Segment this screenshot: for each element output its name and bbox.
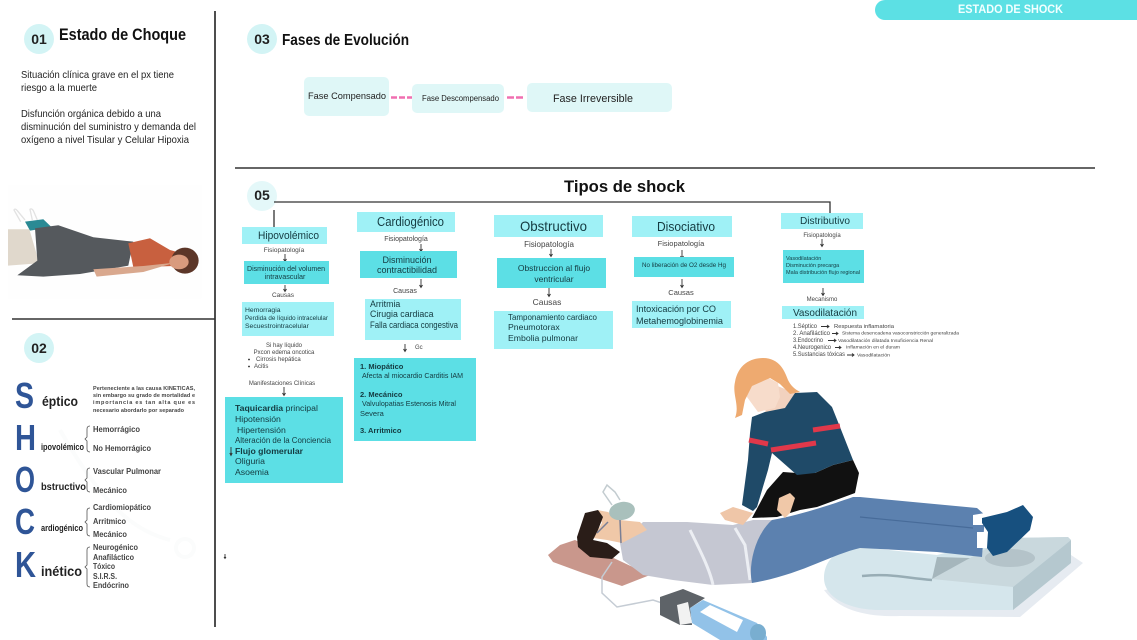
clinical manifestations box [225,397,343,483]
badge 02 [24,333,54,363]
pathophysiology box [497,258,606,288]
mechanism list: 4.Neurogenico [793,345,832,351]
septic description: Perteneciente a las causa KINETICAS, [93,386,195,392]
mechanism list: Sistema desencadena vasoconstricción generalizada [842,330,960,336]
acronym words: éptico [42,393,78,409]
column: Obstructivo: Causas [533,297,561,307]
acronym letters [15,375,36,585]
mechanism list: Respuesta inflamatoria [834,324,895,330]
phase: compensado [304,77,389,116]
column: Obstructivo: Fisiopatología [524,240,574,249]
subtype lists: Tóxico [93,562,115,571]
causes box [242,302,334,336]
title: Cardiogénico [377,214,444,229]
subtype lists: Mecánico [93,530,127,539]
definition text: Disfunción orgánica debido a una [21,108,161,120]
title [242,227,327,244]
mechanism list: 1.Séptico [793,324,818,330]
acronym letters: C [15,501,35,542]
column: Disociativo: Fisiopatología [658,239,705,248]
clinical manifestations box: Flujo glomerular [235,446,304,456]
phase: descompensado: Fase Descompensado [422,94,500,103]
subtypes box [354,358,476,441]
causes box: Arritmia [370,299,400,309]
title [357,212,455,232]
septic description: sin embargo su grado de mortalidad e [93,393,195,399]
fluid notes: Acitis [254,364,268,370]
mechanism list: 5.Sustancias tóxicas [793,352,845,358]
badge 03: 03 [254,31,270,47]
column: Cardiogénico [354,212,476,441]
mechanism list: Vasodilatación dilatada Insuficiencia Renal [838,338,933,343]
acronym words: ipovolémico [41,442,84,452]
clinical manifestations box: Hipotensión [235,414,281,424]
connector [507,96,524,99]
phase: compensado: Fase Compensado [308,91,386,102]
subtype braces [85,426,90,587]
column: Distributivo: Mecanismo [807,297,838,303]
subtype lists: No Hemorrágico [93,444,151,453]
subtype lists: Endócrino [93,581,129,590]
clinical manifestations box: Asoemia [235,467,269,477]
causes box: Falla cardiaca congestiva [370,320,458,330]
connector tree [274,202,830,227]
pathophysiology box: Disminución del volumen [247,264,325,273]
heading: Fases de Evolución: Fases de Evolución [282,32,409,49]
subtype lists: Cardiomiopático [93,503,151,512]
causes box: Hemorragia [245,307,281,314]
causes box: Cirugia cardiaca [370,309,434,319]
pathophysiology box: Disminución [382,255,432,265]
heading: Tipos de shock: Tipos de shock [564,177,686,196]
causes box: Tamponamiento cardiaco [508,312,597,322]
heading: Estado de Choque: Estado de Choque [59,25,186,44]
subtype lists: Hemorrágico [93,425,140,434]
acronym words [41,393,86,579]
pathophysiology box: Mala distribución flujo regional [786,270,860,276]
column: Distributivo [781,213,960,358]
acronym letters: O [15,459,35,500]
fluid notes: Si hay líquido [266,343,303,349]
header pill: Estado de Shock: ESTADO DE SHOCK [958,4,1064,16]
column: Cardiogénico: Gc [415,345,423,351]
pathophysiology box: ventricular [534,274,574,284]
title: Hipovolémico [258,230,319,242]
acronym words: bstructivo [41,482,86,493]
column: Cardiogénico: Causas [393,288,417,295]
mechanism list [793,324,960,358]
subtype lists: Vascular Pulmonar [93,467,161,476]
subtypes box: 2. Mecánico [360,390,403,399]
badge 05 [247,181,277,211]
badge 02: 02 [31,340,47,356]
illustration: rescuer assisting patient with oxygen mask and raised legs [548,358,1083,640]
panel 02: SHOCK acronym [15,333,195,590]
clinical manifestations box: Oliguria [235,456,265,466]
causes box: Intoxicación por CO [636,304,716,315]
acronym letters: H [15,417,36,458]
column: Hipovolémico: Fisiopatología [264,247,305,254]
fluid notes: Pxcon edema oncotica [254,350,315,356]
phase: descompensado [412,84,504,113]
causes box: Embolia pulmonar [508,333,578,343]
causes box: Metahemoglobinemia [636,316,724,327]
title [781,213,863,229]
patient [548,485,1033,586]
mat [824,537,1083,617]
column: Hipovolémico [225,227,343,483]
badge 01: 01 [31,31,47,47]
pathophysiology box: No liberación de O2 desde Hg [642,262,726,269]
watermark: stethoscope [60,430,194,557]
badge 01 [24,24,54,54]
subtypes box: Valvulopatias Estenosis Mitral [362,399,456,408]
title: Disociativo [657,220,715,234]
panel 01: Estado de Choque [8,24,201,298]
definition text: riesgo a la muerte [21,82,97,94]
column: Disociativo: Causas [668,288,694,297]
mechanism list: 2. Anafiláctico [793,331,831,337]
fluid notes: Manifestaciones Clínicas [249,381,315,387]
illustration: patient lying with legs raised [8,185,201,298]
acronym words: inético [41,563,82,579]
rescuer [720,358,859,525]
acronym words: ardiogénico [41,523,83,533]
connector [391,96,414,99]
clinical manifestations box: Hipertensión [237,425,286,435]
acronym letters: S [15,375,34,416]
pathophysiology box: Obstruccion al flujo [518,263,590,273]
column: Obstructivo [494,215,613,349]
mechanism list: Inflamación en el duram [846,344,900,350]
causes box [632,301,731,328]
subtypes box: 1. Miopático [360,362,404,371]
fluid notes: Cirrosis hepática [256,357,301,363]
column: Disociativo [632,216,734,328]
definition text: Situación clínica grave en el px tiene [21,69,174,81]
header pill: Estado de Shock [875,0,1137,20]
definition text [21,69,196,146]
subtypes box: Severa [360,409,385,418]
acronym letters: K [15,544,36,585]
subtype lists: S.I.R.S. [93,572,117,581]
subtypes box: Afecta al miocardio Carditis IAM [362,371,463,380]
clinical manifestations box: Taquicardia principal [235,403,318,413]
septic description: necesario abordarlo por separado [93,408,185,414]
clinical manifestations box: Alteración de la Conciencia [235,435,331,445]
subtype lists [93,425,161,590]
badge 03 [247,24,277,54]
causes box [494,311,613,349]
subtype lists: Arritmico [93,517,126,526]
subtype lists: Anafiláctico [93,553,134,562]
causes box: Secuestrointracelular [245,323,310,330]
septic description [93,386,195,414]
phase: irreversible [527,83,672,112]
causes box [365,299,461,340]
causes box: Perdida de líquido intracelular [245,315,329,322]
small arrow [224,554,226,558]
pathophysiology box: contractibilidad [377,265,437,275]
title: Obstructivo [520,218,587,234]
pathophysiology box: Disminución precarga [786,263,840,269]
fluid notes [248,343,315,387]
pathophysiology box [783,250,864,283]
subtype lists: Mecánico [93,486,127,495]
pathophysiology box [244,261,329,284]
phase: irreversible: Fase Irreversible [553,93,633,105]
mechanism list: Vasodilatación [857,352,891,358]
column: Hipovolémico: Causas [272,292,295,299]
mechanism list: 3.Endocrino [793,338,824,344]
septic description: importancia es tan alta que es [93,400,195,406]
definition text: oxígeno a nivel Tisular y Celular Hipoxia [21,134,189,146]
oxygen cylinder [602,562,767,640]
badge 05: 05 [254,187,270,203]
subtypes box: 3. Arritmico [360,426,402,435]
column: Cardiogénico: Fisiopatología [384,236,428,243]
column: Distributivo: Fisiopatología [803,233,841,239]
mechanism box: Vasodilatación [793,307,857,319]
causes box: Pneumotorax [508,322,560,332]
subtype lists: Neurogénico [93,543,138,552]
pathophysiology box: intravascular [265,272,306,281]
pathophysiology box: Vasodilatación [786,256,821,262]
pathophysiology box [360,251,457,278]
title: Distributivo [800,216,850,227]
definition text: disminución del suministro y demanda del [21,121,196,133]
panel 03: Fases de Evolución [247,24,672,116]
